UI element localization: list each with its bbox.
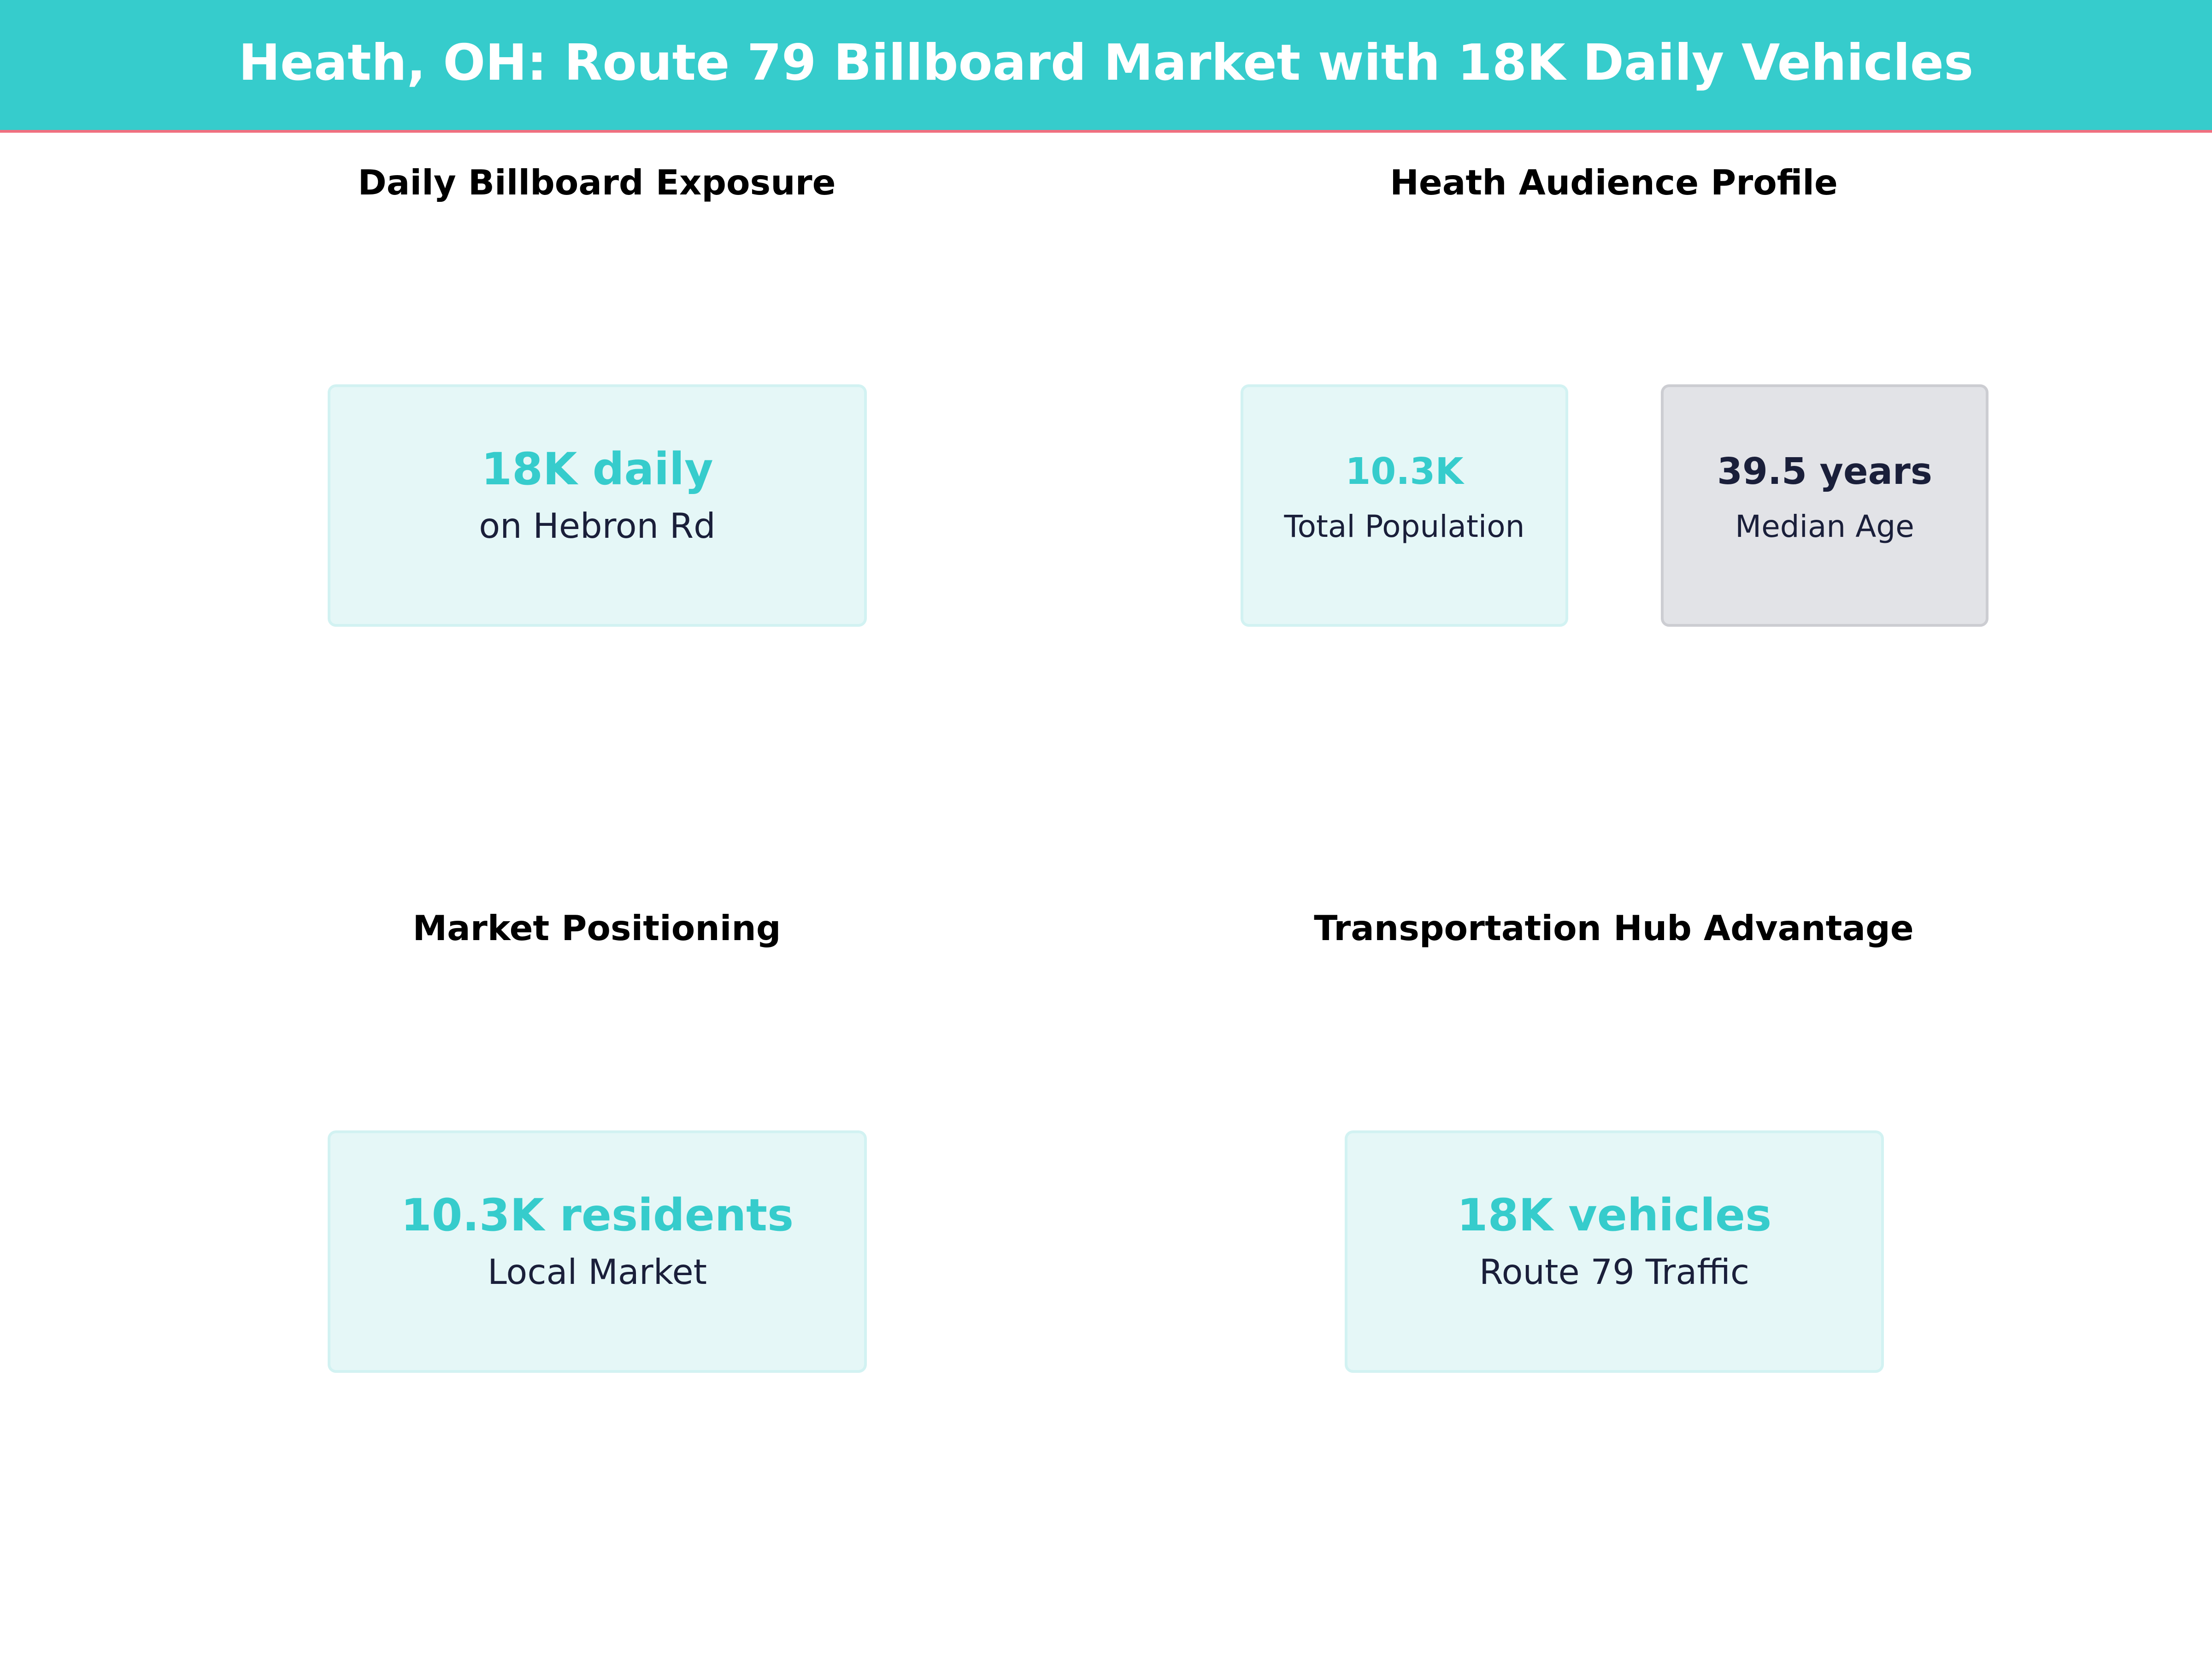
stat box: total population: 10.3K	[1345, 450, 1464, 493]
stat box: vehicles: 18K vehicles	[1457, 1189, 1771, 1241]
stat box: 18K daily	[328, 384, 867, 627]
stat box: residents	[328, 1130, 867, 1373]
title: Heath, OH: Route 79 Billboard Market with 18K Daily Vehicles	[239, 34, 1973, 92]
panel heading: transportation hub: Transportation Hub Advantage	[1314, 908, 1914, 948]
stat box: median age: 39.5 years	[1717, 450, 1932, 493]
stat box: total population	[1241, 384, 1568, 627]
panel heading: market positioning: Market Positioning	[412, 908, 781, 948]
stat box: median age	[1661, 384, 1988, 627]
stat box: 18K daily: on Hebron Rd	[479, 506, 716, 546]
stat box: residents: 10.3K residents	[401, 1189, 794, 1241]
stat box: 18K daily: 18K daily	[481, 443, 713, 495]
panel heading: daily exposure: Daily Billboard Exposure	[358, 162, 835, 203]
stat box: median age: Median Age	[1735, 509, 1914, 544]
stat box: vehicles	[1345, 1130, 1884, 1373]
stat box: vehicles: Route 79 Traffic	[1479, 1252, 1749, 1292]
stat box: residents: Local Market	[488, 1252, 707, 1292]
panel heading: audience profile: Heath Audience Profile	[1390, 162, 1838, 203]
stat box: total population: Total Population	[1284, 509, 1524, 544]
header banner	[0, 0, 2212, 133]
